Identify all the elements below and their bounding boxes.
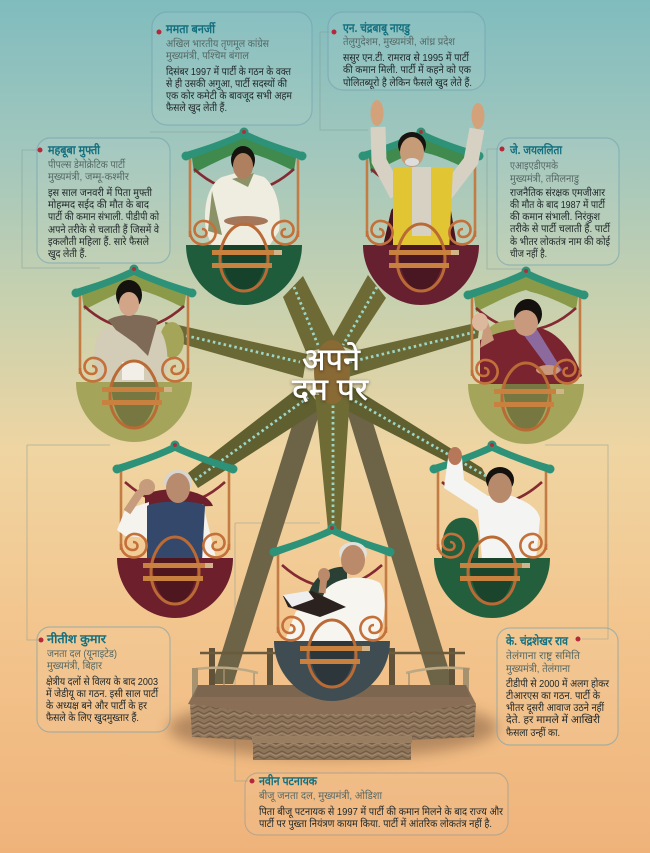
callout: Nitish Kumar: मुख्यमंत्री, बिहार xyxy=(47,659,103,672)
callout: Naveen Patnaik xyxy=(245,773,508,835)
callout: J. Jayalalithaa: जे. जयललिता xyxy=(509,143,563,157)
callout: Mamata Banerjee: फैसले खुद लेती हैं. xyxy=(166,101,227,114)
callout: Mamata Banerjee: ममता बनर्जी xyxy=(165,22,216,36)
platform xyxy=(168,648,498,760)
person xyxy=(94,280,167,382)
callout: K. Chandrashekar Rao: तेलंगाना राष्ट्र समिति xyxy=(506,649,581,662)
title: अपने xyxy=(302,342,361,377)
callout: Chandrababu Naidu: ससुर एन.टी. रामराव से 1995 में पार्टी xyxy=(343,51,470,64)
leader lines xyxy=(22,32,608,781)
callout: Nitish Kumar xyxy=(37,627,170,732)
callout: Mehbooba Mufti: पीपल्स डेमोक्रेटिक पार्टी xyxy=(48,158,126,171)
title: दम पर xyxy=(292,372,369,407)
callout: Mehbooba Mufti: इकलौती महिला हैं. सारे फैसले xyxy=(48,235,150,248)
callout: Naveen Patnaik: पिता बीजू पटनायक से 1997 में पार्टी की कमान मिलने के बाद राज्य और xyxy=(259,805,504,818)
callout: Mehbooba Mufti: महबूबा मुफ्ती xyxy=(47,143,101,158)
person xyxy=(205,146,280,251)
person xyxy=(444,447,540,560)
callout: Nitish Kumar: जनता दल (यूनाइटेड) xyxy=(47,647,117,660)
callout: Mamata Banerjee: एक कोर कमेटी के बावजूद सभी अहम xyxy=(166,89,293,102)
callout: Mehbooba Mufti xyxy=(37,138,170,263)
callout: K. Chandrashekar Rao: भीतर दूसरी आवाज उठने नहीं xyxy=(506,701,604,715)
person xyxy=(370,100,484,253)
callout: Mehbooba Mufti: अपने तरीके से चलाती हैं जिसमें वे xyxy=(48,223,159,236)
callout: Nitish Kumar: क्षेत्रीय दलों से विलय के बाद 2003 xyxy=(46,675,158,688)
callout: Nitish Kumar: के अध्यक्ष बने और पार्टी के हर xyxy=(46,699,148,712)
callout: Mehbooba Mufti: खुद लेती हैं. xyxy=(48,247,87,260)
wheel spokes xyxy=(165,275,490,530)
callout: Chandrababu Naidu: एन. चंद्रबाबू नायडु xyxy=(342,21,410,36)
callout: J. Jayalalithaa: की मौत के बाद 1987 में पार्टी xyxy=(510,198,606,211)
callout: Mehbooba Mufti: पार्टी की कमान संभाली. पीडीपी को xyxy=(48,210,159,223)
gondola: Naveen Patnaik xyxy=(270,524,394,701)
callout: Mehbooba Mufti: इस साल जनवरी में पिता मुफ्ती xyxy=(48,186,152,199)
callout: Mamata Banerjee: मुख्यमंत्री, पश्चिम बंगाल xyxy=(166,49,250,62)
callout: Mamata Banerjee xyxy=(152,12,312,125)
callout: Mamata Banerjee: अखिल भारतीय तृणमूल कांग्रेस xyxy=(166,37,270,50)
callout: Naveen Patnaik: पार्टी पर पुख्ता नियंत्रण कायम किया. पार्टी में आंतरिक लोकतंत्र नहीं है. xyxy=(259,817,492,830)
callout: J. Jayalalithaa: राजनैतिक संरक्षक एमजीआर xyxy=(510,186,606,199)
stand legs xyxy=(212,400,455,690)
callout: J. Jayalalithaa: तरीके से पार्टी चलाती हैं. पार्टी xyxy=(510,222,611,235)
title xyxy=(292,342,369,407)
callout: Chandrababu Naidu xyxy=(328,12,485,90)
callout: K. Chandrashekar Rao: फैसला उन्हीं का. xyxy=(506,726,560,739)
callout: Nitish Kumar: फैसले के लिए खुदमुख्तार हैं. xyxy=(46,711,139,724)
callout: K. Chandrashekar Rao: देते. हर मामले में आखिरी xyxy=(506,713,600,726)
callout: Naveen Patnaik: नवीन पटनायक xyxy=(258,774,318,788)
callout: K. Chandrashekar Rao: मुख्यमंत्री, तेलंगाना xyxy=(506,662,570,675)
callout: J. Jayalalithaa xyxy=(497,138,619,265)
callout: J. Jayalalithaa: एआइएडीएमके xyxy=(510,159,559,172)
callout: Naveen Patnaik: बीजू जनता दल, मुख्यमंत्री, ओडिशा xyxy=(259,789,382,802)
callout: J. Jayalalithaa: चीज नहीं है. xyxy=(510,247,547,260)
person xyxy=(283,542,385,643)
callout: J. Jayalalithaa: के भीतर लोकतंत्र नाम की कोई xyxy=(510,235,611,248)
gondola: K. Chandrashekar Rao xyxy=(430,440,554,618)
callout: Mamata Banerjee: से ही उसकी अगुआ, पार्टी सदस्यों की xyxy=(166,77,287,90)
wheel hub xyxy=(314,340,350,404)
person xyxy=(472,299,582,384)
callout: Nitish Kumar: नीतीश कुमार xyxy=(46,632,107,647)
callout: J. Jayalalithaa: की कमान संभाली. निरंकुश xyxy=(510,210,601,223)
callout: Mehbooba Mufti: मुख्यमंत्री, जम्मू-कश्मीर xyxy=(48,170,130,183)
callout: Mehbooba Mufti: मोहम्मद सईद की मौत के बाद xyxy=(48,198,149,211)
callout: K. Chandrashekar Rao: टीआरएस का गठन. पार्टी के xyxy=(506,689,601,702)
gondola: Nitish Kumar xyxy=(112,440,238,618)
callout: K. Chandrashekar Rao xyxy=(497,628,618,745)
callout: Chandrababu Naidu: की कमान मिली. पार्टी में कहने को एक xyxy=(343,63,472,76)
gondola: Mehbooba Mufti xyxy=(72,264,196,442)
callout: K. Chandrashekar Rao: के. चंद्रशेखर राव xyxy=(505,634,569,648)
callout: Mamata Banerjee: दिसंबर 1997 में पार्टी के गठन के वक्त xyxy=(166,65,292,78)
callout: J. Jayalalithaa: मुख्यमंत्री, तमिलनाडु xyxy=(510,172,579,185)
callout: Nitish Kumar: में जेडीयू का गठन. इसी साल पार्टी xyxy=(46,687,159,700)
callout: Chandrababu Naidu: तेलुगुदेशम, मुख्यमंत्री, आंध्र प्रदेश xyxy=(343,35,456,48)
gondola: J. Jayalalithaa xyxy=(464,266,588,444)
gondola: Mamata Banerjee xyxy=(182,128,306,305)
gondola: Chandrababu Naidu xyxy=(358,100,484,305)
callout: Chandrababu Naidu: पोलितब्यूरो है लेकिन फैसले खुद लेते हैं. xyxy=(343,76,472,89)
person xyxy=(117,470,217,562)
callout: K. Chandrashekar Rao: टीडीपी से 2000 में अलग होकर xyxy=(506,677,610,690)
